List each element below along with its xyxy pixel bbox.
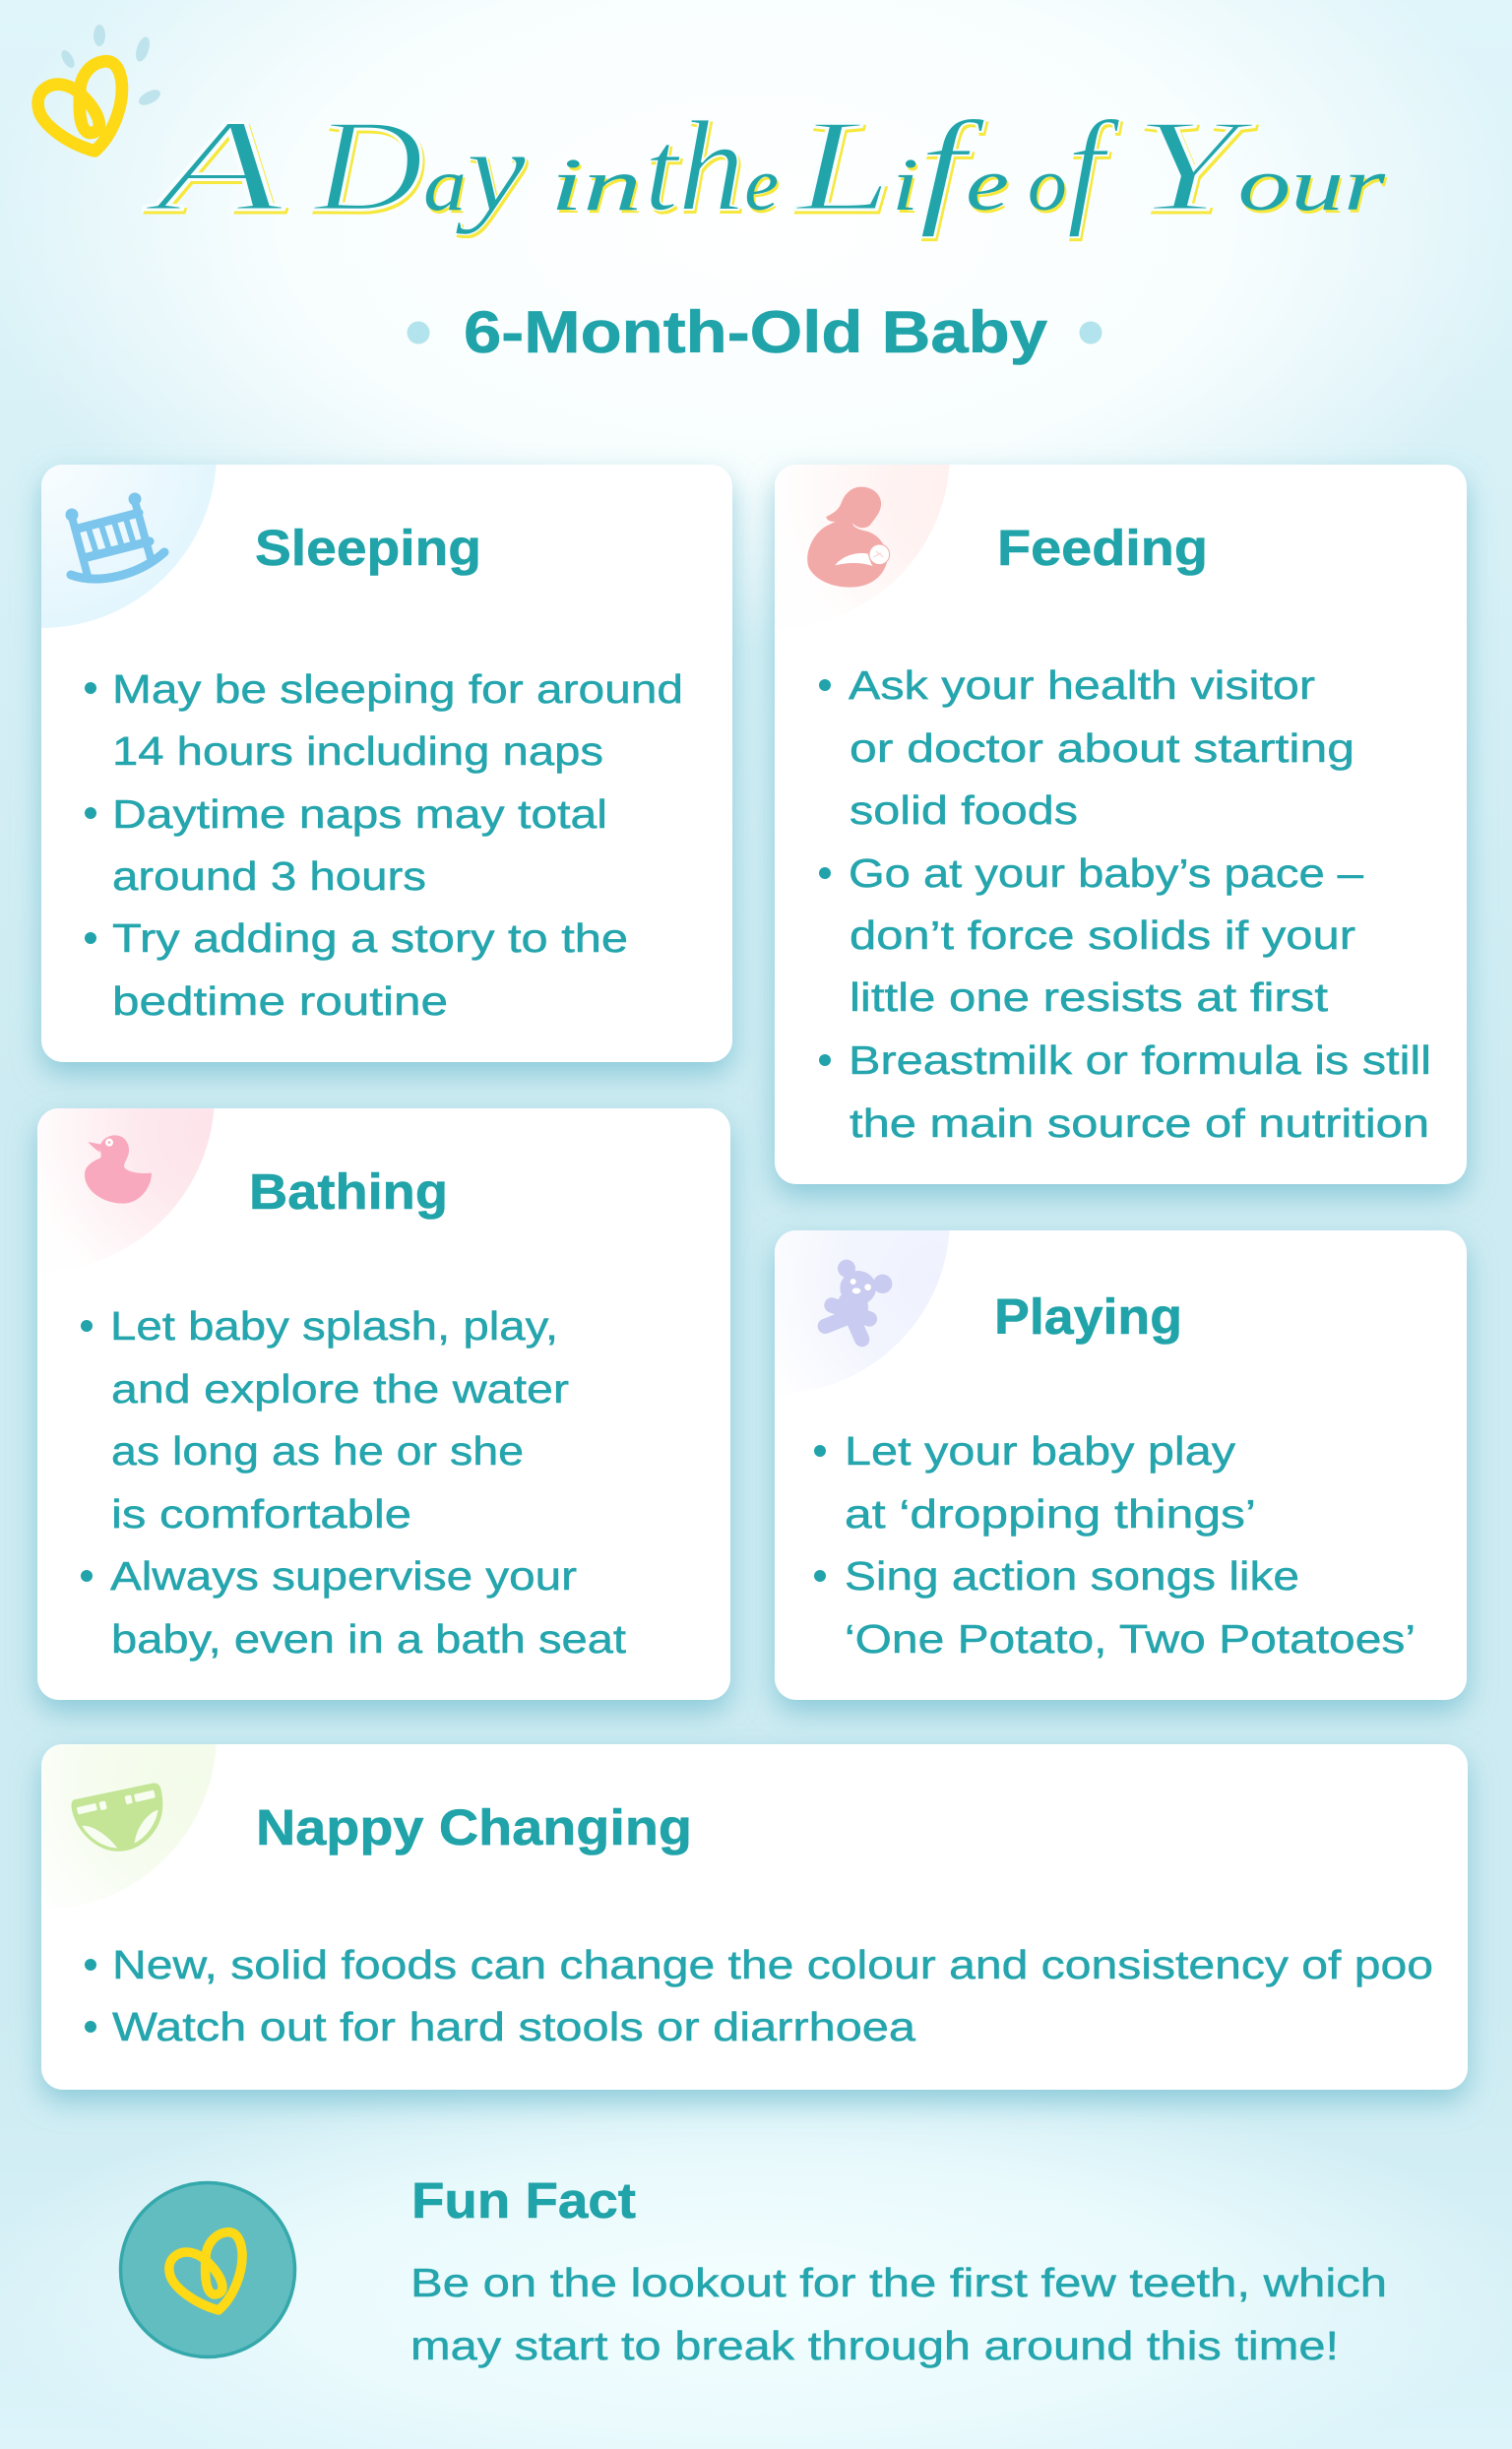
title: in (550, 144, 642, 226)
text: bathing tips: and explore the water (111, 1366, 569, 1412)
text: sleeping tips: bedtime routine (112, 978, 448, 1024)
text: bathing tips: as long as he or she (111, 1428, 524, 1474)
text: playing tips: at ‘dropping things’ (845, 1491, 1256, 1537)
text: playing tips (814, 1428, 1416, 1662)
title: the (645, 94, 779, 238)
text: bathing tips: Always supervise your (110, 1553, 577, 1599)
panel: nappy changing (26, 1740, 1483, 2118)
text: feeding tips: little one resists at first (850, 974, 1329, 1020)
text: sleeping tips: 14 hours including naps (112, 728, 603, 774)
text: feeding tips (819, 662, 1431, 1146)
text: nappy tips: Watch out for hard stools or diarrhoea (112, 2004, 915, 2049)
text: feeding tips: or doctor about starting (850, 725, 1354, 771)
icon: rocking crib (67, 494, 164, 579)
text: playing tips: Sing action songs like (845, 1553, 1299, 1599)
text: feeding tips: solid foods (850, 787, 1078, 833)
title: A (143, 93, 285, 238)
text: feeding tips: Ask your health visitor (849, 662, 1315, 708)
icon: rubber duck (85, 1135, 152, 1204)
text: playing tips: ‘One Potato, Two Potatoes’ (845, 1616, 1416, 1662)
title (143, 93, 1386, 238)
title: L ife (793, 93, 1009, 238)
panel: feeding (758, 458, 1482, 1211)
text: sleeping tips: around 3 hours (112, 853, 426, 899)
panel: bathing (22, 1104, 746, 1727)
panel: sleeping (26, 458, 750, 1089)
icon: teddy bear (825, 1260, 892, 1340)
text: fun fact body (410, 2260, 1387, 2368)
title: Y our (1134, 93, 1386, 238)
text: feeding tips: Go at your baby’s pace – (849, 850, 1363, 896)
fun fact (120, 2172, 1387, 2368)
icon: yellow heart logo with rays (38, 25, 162, 151)
text: sleeping tips: Try adding a story to the (112, 915, 628, 961)
icon: mother and baby (807, 487, 890, 588)
text: bathing tips: is comfortable (111, 1491, 411, 1537)
heading: playing: Playing (994, 1288, 1182, 1345)
heading: feeding: Feeding (997, 520, 1208, 576)
title: Day (312, 93, 527, 238)
panel: playing (760, 1226, 1482, 1727)
heading: sleeping: Sleeping (255, 520, 481, 576)
text: nappy tips (85, 1942, 1433, 2049)
text: feeding tips: don’t force solids if your (850, 912, 1355, 958)
icon: heart in teal circle (120, 2183, 295, 2356)
text: sleeping tips: May be sleeping for around (112, 666, 683, 712)
text: playing tips: Let your baby play (845, 1428, 1236, 1474)
text: nappy tips: New, solid foods can change the colour and consistency of poo (112, 1942, 1433, 1987)
text: sleeping tips (85, 666, 683, 1024)
text: fun fact body: may start to break through around this time! (410, 2323, 1339, 2368)
subtitle: 6-Month-Old Baby (464, 299, 1048, 365)
text: bathing tips: Let baby splash, play, (110, 1303, 558, 1349)
heading: fun fact: Fun Fact (411, 2172, 636, 2229)
text: bathing tips (81, 1303, 627, 1662)
text: bathing tips: baby, even in a bath seat (111, 1616, 627, 1662)
heading: bathing: Bathing (249, 1163, 448, 1220)
text: fun fact body: Be on the lookout for the first few teeth, which (410, 2260, 1387, 2305)
text: feeding tips: the main source of nutrition (850, 1100, 1429, 1146)
text: feeding tips: Breastmilk or formula is still (849, 1037, 1431, 1083)
heading: nappy changing: Nappy Changing (256, 1799, 692, 1855)
text: sleeping tips: Daytime naps may total (112, 791, 607, 837)
title: of (1028, 94, 1120, 238)
icon: nappy (72, 1784, 162, 1852)
